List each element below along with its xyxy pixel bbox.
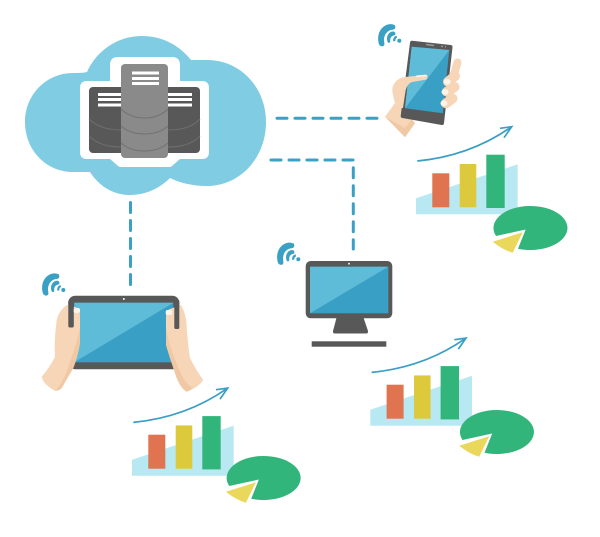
trend arrow — [133, 388, 228, 422]
cloud shape — [25, 36, 266, 195]
monitor body — [306, 261, 392, 318]
left thumb nail — [74, 308, 80, 313]
phone screen highlight — [405, 47, 449, 108]
green bar — [441, 366, 459, 419]
phone speaker and camera — [426, 44, 446, 47]
monitor stand — [333, 317, 368, 334]
red bar — [148, 435, 165, 469]
cloud with servers — [25, 36, 266, 195]
tablet body — [68, 296, 179, 369]
palm — [385, 75, 425, 128]
phone body — [403, 43, 450, 123]
pie chart — [493, 206, 567, 250]
left tablet bezel strip — [68, 300, 74, 328]
dashed connector: cloud to phone — [277, 117, 380, 120]
right thumb nail — [166, 310, 172, 315]
forearm shadow — [385, 100, 415, 137]
back server rack — [89, 87, 200, 153]
yellow bar — [176, 425, 192, 469]
wifi icon: phone — [378, 24, 401, 46]
fingers — [446, 62, 458, 103]
right hand shadow — [166, 328, 193, 392]
pie slice — [226, 482, 256, 503]
red bar — [432, 173, 449, 207]
desktop monitor — [306, 261, 392, 347]
area background — [416, 164, 518, 214]
green bar — [202, 416, 221, 469]
pie chart — [227, 456, 301, 500]
tablet screen highlight — [74, 303, 173, 362]
pie slice — [459, 436, 489, 457]
yellow bar — [414, 375, 431, 419]
wifi icon: tablet — [42, 273, 65, 296]
right hand — [166, 305, 203, 392]
chart group: bottom left — [132, 388, 301, 503]
area background — [370, 376, 472, 426]
pie chart — [460, 410, 534, 454]
green bar — [486, 155, 505, 208]
trend arrow — [372, 338, 466, 372]
tablet camera — [123, 298, 125, 300]
thumb nail — [417, 74, 426, 77]
smartphone held in hand — [385, 43, 458, 137]
monitor screen highlight — [310, 267, 388, 313]
trend arrow — [417, 127, 512, 161]
monitor base — [312, 341, 386, 347]
yellow bar — [460, 164, 476, 207]
dashed connector: cloud to monitor — [271, 160, 353, 249]
pie slice — [493, 232, 523, 253]
area background — [132, 426, 234, 476]
phone screen dark — [405, 47, 449, 113]
left hand shadow — [55, 328, 80, 391]
chart group: middle right — [370, 338, 534, 457]
dashed connector: cloud to tablet — [129, 202, 132, 285]
right tablet bezel strip — [174, 300, 179, 329]
left hand — [42, 305, 80, 391]
monitor screen dark — [310, 267, 388, 313]
tablet held in two hands — [42, 296, 203, 392]
front server tower — [121, 64, 168, 158]
wifi icon: monitor — [277, 243, 300, 265]
monitor camera — [348, 263, 350, 265]
chart group: top right — [416, 127, 567, 253]
red bar — [387, 385, 404, 419]
finger nails — [440, 79, 451, 106]
thumb — [398, 75, 428, 108]
tablet screen dark — [74, 303, 173, 362]
white server backing — [80, 57, 209, 167]
